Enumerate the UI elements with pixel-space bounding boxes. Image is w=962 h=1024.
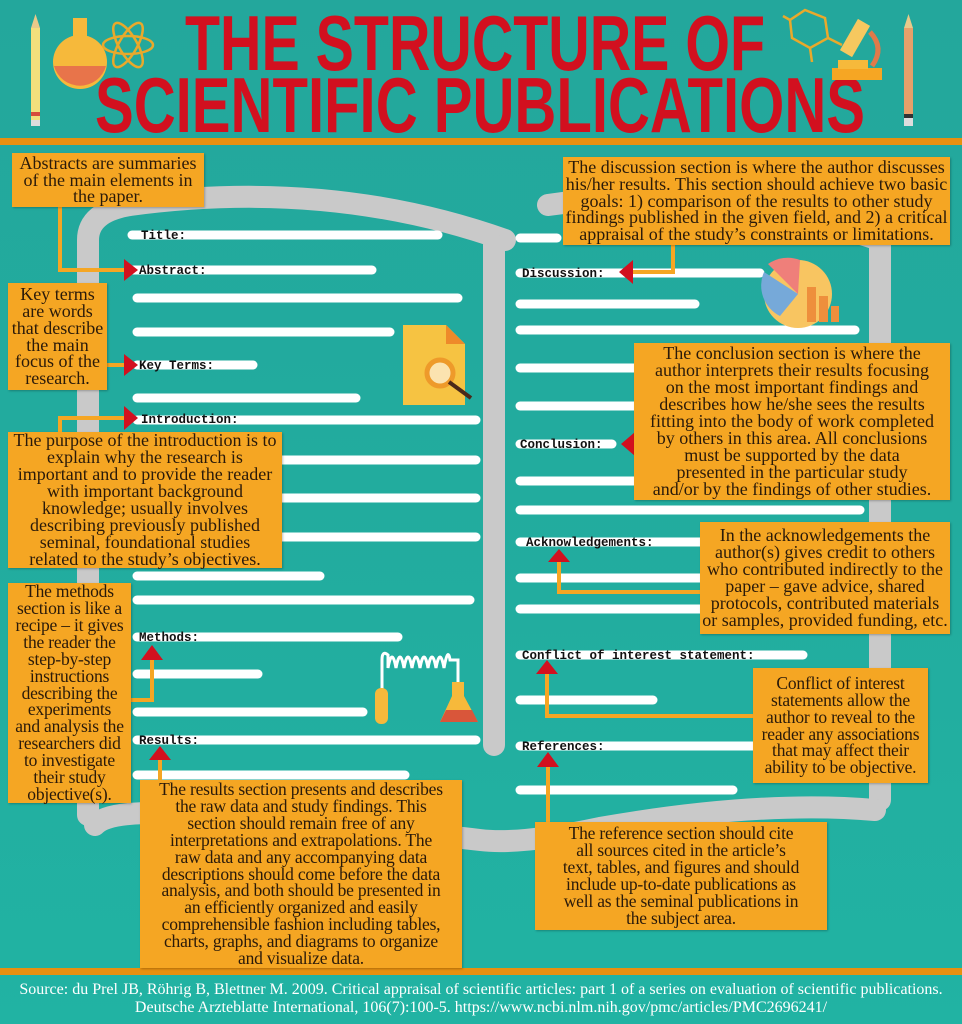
callout: methods: researchers did (18, 733, 121, 753)
callout: key terms: are words (22, 301, 93, 321)
callout: methods: experiments (28, 699, 111, 719)
callout: conflict of interest: ability to be objective. (765, 757, 916, 777)
icon: pencil left (31, 14, 40, 126)
text: References: (522, 740, 605, 754)
callout: references: text, tables, and figures and should (563, 857, 799, 877)
callout: conflict of interest: Conflict of interest (776, 673, 905, 693)
callout: methods: The methods (25, 581, 114, 601)
callout: results: interpretations and extrapolations. The (170, 830, 432, 850)
footer source text (19, 981, 943, 1016)
callout: methods: and analysis the (15, 716, 124, 736)
icon: pencil right (904, 14, 913, 126)
callout: acknowledgements: protocols, contributed materials (711, 593, 939, 613)
callout: conclusion (634, 343, 950, 500)
text: Discussion: (522, 267, 605, 281)
callout: conclusion: describes how he/she sees the results (659, 394, 925, 414)
callout: conflict of interest: that may affect their (772, 740, 909, 760)
callout: conclusion: author interprets their results focusing (655, 360, 929, 380)
title: THE STRUCTURE OF (185, 0, 765, 87)
text: Methods: (139, 631, 199, 645)
callout: key terms: Key terms (20, 284, 95, 304)
callout: acknowledgements: or samples, provided funding, etc. (702, 610, 948, 630)
callout: references: the subject area. (626, 908, 736, 928)
text: Abstract: (139, 264, 207, 278)
callout: abstract: Abstracts are summaries (20, 153, 196, 173)
callout: acknowledgements: who contributed indirectly to the (707, 559, 943, 579)
icon: pie chart (761, 258, 839, 328)
callout: discussion (563, 157, 950, 245)
section labels: Title: (141, 229, 186, 243)
callout: introduction: knowledge; usually involves (42, 498, 248, 518)
icon: microscope (832, 19, 882, 80)
callout: discussion: appraisal of the study’s constraints or limitations. (579, 224, 934, 244)
text: Acknowledgements: (526, 536, 654, 550)
callout: methods: recipe – it gives (16, 615, 123, 635)
icon: molecule (783, 10, 842, 62)
text: Results: (139, 734, 199, 748)
callout: acknowledgements: author(s) gives credit to others (715, 542, 935, 562)
callout: methods: step-by-step (28, 649, 111, 669)
icon: lab coil and flask (375, 653, 478, 724)
callout: acknowledgements: paper – gave advice, shared (725, 576, 925, 596)
callout: results: raw data and any accompanying data (175, 847, 427, 867)
callout: references: well as the seminal publications in (564, 891, 798, 911)
callout: methods: objective(s). (27, 784, 112, 804)
callout: results: section should remain free of any (187, 813, 415, 833)
callout: results: an efficiently organized and easily (184, 897, 418, 917)
callout: key terms: focus of the (15, 351, 100, 371)
callout: methods: their study (33, 767, 106, 787)
callout: conflict of interest: author to reveal to the (766, 707, 915, 727)
callout: methods: to investigate (24, 750, 115, 770)
callout: methods: the reader the (23, 632, 116, 652)
callout: discussion: findings published in the given field, and 2) a critical (566, 207, 947, 227)
header icons (31, 8, 913, 126)
callout: abstract (12, 153, 204, 207)
callout: key terms: that describe (12, 318, 103, 338)
callout: results: descriptions should come before the data (162, 864, 440, 884)
callout: conclusion: The conclusion section is where the (663, 343, 921, 363)
callout: introduction: important and to provide the reader (18, 464, 272, 484)
text: Key Terms: (139, 359, 214, 373)
callout: introduction: seminal, foundational studies (40, 532, 250, 552)
callout: results: and visualize data. (238, 948, 364, 968)
callout: conclusion: must be supported by the data (684, 445, 900, 465)
callout: references: all sources cited in the article’s (576, 840, 786, 860)
callout: introduction: related to the study’s objectives. (29, 549, 261, 569)
callout: discussion: his/her results. This section should achieve two basic (566, 174, 947, 194)
callout: references (535, 822, 827, 930)
callout: key terms (8, 283, 107, 390)
callout: methods: describing the (22, 683, 117, 703)
callout: conclusion: presented in the particular study (677, 462, 907, 482)
callout: methods (8, 583, 131, 803)
callout: abstract: the paper. (73, 186, 143, 206)
footer source text: Source: du Prel JB, Röhrig B, Blettner M. 2009. Critical appraisal of scientific articles: part 1 of a series on evaluation of scientific publications. (19, 981, 943, 998)
callout: conclusion: by others in this area. All conclusions (657, 428, 927, 448)
callout: introduction: The purpose of the introduction is to (14, 430, 276, 450)
callout: conflict of interest (753, 668, 928, 783)
callout: references: include up-to-date publications as (566, 874, 796, 894)
callout: introduction: describing previously published (30, 515, 260, 535)
title (95, 0, 865, 140)
footer source text: Deutsche Arzteblatte International, 106(7):100-5. https://www.ncbi.nlm.nih.gov/pmc/articles/PMC2696241/ (135, 999, 827, 1016)
callout: methods: instructions (30, 666, 109, 686)
callout: results: comprehensible fashion including tables, (162, 914, 440, 934)
callout: results: charts, graphs, and diagrams to organize (164, 931, 438, 951)
callout: results: The results section presents and describes (159, 779, 443, 799)
callout: acknowledgements: In the acknowledgements the (720, 525, 930, 545)
callout: conclusion: on the most important findings and (666, 377, 918, 397)
callout: references: The reference section should cite (569, 823, 793, 843)
callout: conflict of interest: statements allow the (771, 690, 910, 710)
icon: flask (53, 18, 107, 89)
callout: key terms: the main (26, 334, 89, 354)
callout: conflict of interest: reader any associations (762, 724, 919, 744)
text: Conclusion: (520, 438, 603, 452)
callout: conclusion: fitting into the body of work completed (650, 411, 934, 431)
callout: results: the raw data and study findings. This (175, 796, 427, 816)
callout: conclusion: and/or by the findings of other studies. (653, 479, 931, 499)
callout: introduction (8, 432, 282, 568)
callout: discussion: goals: 1) comparison of the results to other study (581, 191, 932, 211)
text: Conflict of interest statement: (522, 649, 755, 663)
callout: key terms: research. (25, 368, 90, 388)
callout: discussion: The discussion section is where the author discusses (568, 157, 945, 177)
callout: introduction: explain why the research is (47, 447, 243, 467)
callout: results (140, 780, 462, 968)
callout: introduction: with important background (47, 481, 243, 501)
callout: results: analysis, and both should be presented in (161, 880, 441, 900)
text: Introduction: (141, 413, 239, 427)
callout: acknowledgements (700, 522, 950, 634)
callout: methods: section is like a (17, 598, 122, 618)
callout: abstract: of the main elements in (24, 170, 192, 190)
icon: atom (103, 19, 153, 71)
icon: document with magnifier (403, 325, 471, 405)
